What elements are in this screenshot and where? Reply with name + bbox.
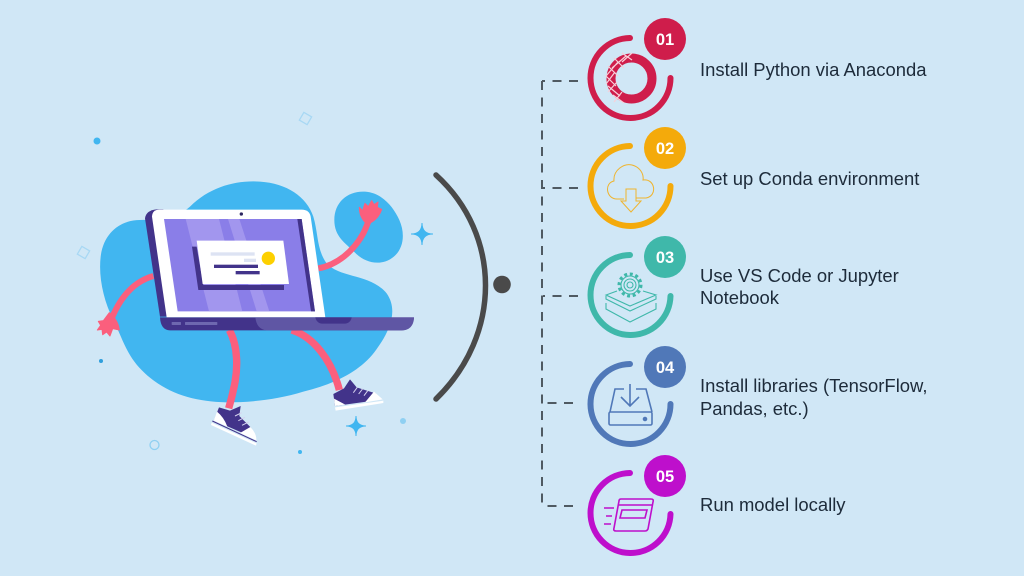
- right shoe: [333, 379, 383, 411]
- label 04: Install libraries (TensorFlow,: [700, 375, 927, 396]
- laptop: [145, 209, 414, 330]
- ring 04: [590, 364, 670, 444]
- icon: cloud download: [608, 165, 654, 212]
- step 04: Pandas, etc.): [700, 398, 809, 419]
- label 02: Set up Conda environment: [700, 168, 919, 189]
- icon: window speed: [604, 499, 653, 531]
- step 05: 05: [656, 468, 674, 486]
- left arm: [112, 276, 153, 318]
- icon: install drive: [609, 384, 652, 425]
- step 04: 04: [656, 359, 675, 377]
- step 01: 01: [656, 31, 674, 49]
- step 01: [590, 18, 927, 118]
- step 04: [590, 346, 927, 444]
- step 03: [591, 236, 899, 335]
- step 02: [590, 127, 919, 226]
- screen: [164, 219, 315, 311]
- center dot: [493, 276, 511, 293]
- label 03: Use VS Code or Jupyter: [700, 265, 899, 286]
- badge 02: [644, 127, 686, 169]
- laptop lid: [152, 210, 325, 317]
- left shoe: [211, 406, 257, 446]
- icon: gear layers: [606, 274, 656, 322]
- laptop lid back: [145, 209, 170, 317]
- step 02: 02: [656, 140, 674, 158]
- step 03: 03: [656, 249, 674, 267]
- laptop base: [160, 317, 414, 330]
- badge 01: [644, 18, 686, 60]
- decor: sparkles and dots: [77, 112, 433, 454]
- step 03: Notebook: [700, 287, 780, 308]
- label 05: Run model locally: [700, 494, 846, 515]
- label 01: Install Python via Anaconda: [700, 59, 927, 80]
- bracket arc: [436, 175, 486, 399]
- ring 05: [591, 473, 670, 553]
- badge 05: [644, 455, 686, 497]
- right hand: [359, 201, 382, 224]
- ring 02: [590, 146, 670, 226]
- left hand: [97, 313, 119, 336]
- right arm: [318, 217, 370, 268]
- badge 04: [644, 346, 686, 388]
- dashed connector: [542, 81, 578, 506]
- dialog card: [192, 241, 289, 290]
- background blob: [100, 181, 392, 402]
- small blob: [334, 192, 403, 263]
- ring 01: [590, 38, 670, 118]
- webcam: [240, 212, 243, 216]
- ring 03: [591, 255, 670, 335]
- illustration: laptop character: [97, 181, 414, 446]
- step 05: [591, 455, 846, 553]
- left leg: [229, 330, 237, 408]
- right leg: [292, 330, 339, 390]
- badge 03: [644, 236, 686, 278]
- icon: anaconda: [606, 53, 652, 103]
